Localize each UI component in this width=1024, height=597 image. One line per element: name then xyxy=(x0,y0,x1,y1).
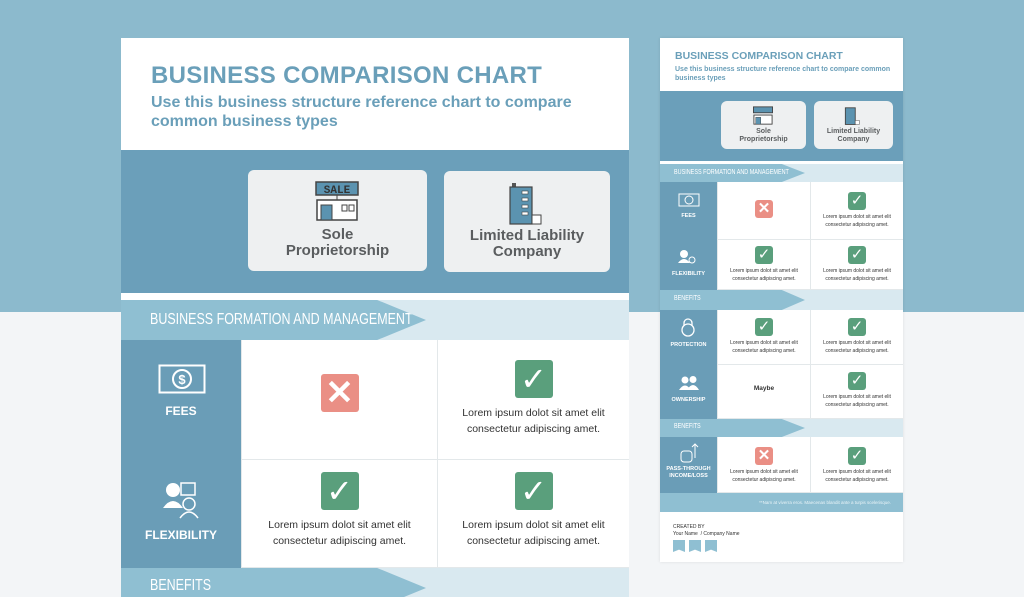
panel: small full chart card: consectetur adipiscing amet. xyxy=(825,222,889,228)
ribbon: benefits 2: BENEFITS xyxy=(674,423,701,430)
subtitle: Use this business structure reference chart to compare common business types xyxy=(151,94,572,130)
panel: small full chart card: Lorem ipsum dolot sit amet elit xyxy=(823,214,891,220)
sidebar 3: PASS-THROUGH xyxy=(666,466,711,472)
section ribbon: benefits: BENEFITS xyxy=(150,577,211,594)
panel: small full chart card: Lorem ipsum dolot sit amet elit xyxy=(823,469,891,475)
row sidebar: FLEXIBILITY xyxy=(145,528,217,542)
title: BUSINESS COMPARISON CHART xyxy=(151,62,542,89)
column header: llc: Company xyxy=(493,243,561,260)
panel: large chart card: consectetur adipiscing amet. xyxy=(467,535,600,547)
header band: Company xyxy=(838,136,869,143)
header band: Sole xyxy=(756,128,771,135)
panel: small full chart card: Lorem ipsum dolot sit amet elit xyxy=(823,340,891,346)
column header: sole proprietorship xyxy=(248,170,427,271)
footnote bar xyxy=(660,493,903,512)
panel: small full chart card xyxy=(660,38,903,562)
header band xyxy=(121,150,629,293)
row sidebar: FEES xyxy=(165,404,197,418)
icon: dollar bill: $ xyxy=(178,372,186,387)
panel: small full chart card: consectetur adipiscing amet. xyxy=(825,477,889,483)
row: flexibility cells: Lorem ipsum dolot sit amet elit xyxy=(268,519,411,531)
panel: small full chart card: consectetur adipiscing amet. xyxy=(825,348,889,354)
panel: small full chart card: Lorem ipsum dolot sit amet elit xyxy=(730,469,798,475)
sidebar 1 xyxy=(660,182,717,290)
panel: large chart card: consectetur adipiscing amet. xyxy=(467,423,600,435)
panel: large chart card: ✓ xyxy=(520,473,547,509)
footer credits: Your Name / Company Name xyxy=(673,531,740,537)
row: fees cells xyxy=(241,340,437,460)
column header: sole proprietorship: Proprietorship xyxy=(286,242,389,259)
panel: small full chart card: ✓ xyxy=(758,318,770,335)
sidebar 3 xyxy=(660,437,717,493)
ribbon: benefits: BENEFITS xyxy=(674,295,701,302)
icon: check: ✓ xyxy=(520,361,547,397)
panel: small full chart card: ✓ xyxy=(851,372,863,389)
icons: social xyxy=(673,540,717,552)
panel: small full chart card: consectetur adipiscing amet. xyxy=(825,276,889,282)
panel: small full chart card: ✕ xyxy=(758,447,770,464)
panel: small full chart card: Lorem ipsum dolot sit amet elit xyxy=(823,268,891,274)
panel: small full chart card: consectetur adipiscing amet. xyxy=(732,276,796,282)
ribbon: formation: BUSINESS FORMATION AND MANAGEMENT xyxy=(674,169,789,176)
panel: large chart card: Lorem ipsum dolot sit amet elit xyxy=(462,407,605,419)
section ribbon: business formation xyxy=(121,300,629,340)
panel: small full chart card: consectetur adipiscing amet. xyxy=(732,477,796,483)
panel: small full chart card: ✓ xyxy=(758,246,770,263)
ribbon: benefits 2 xyxy=(660,419,903,437)
sidebar 1: FLEXIBILITY xyxy=(672,271,705,277)
panel: large chart card: Lorem ipsum dolot sit amet elit xyxy=(462,519,605,531)
panel: small full chart card: ✓ xyxy=(851,192,863,209)
column header: llc xyxy=(444,171,610,272)
icon: cross: ✕ xyxy=(325,374,354,412)
ribbon: benefits xyxy=(660,290,903,310)
sidebar 2 xyxy=(660,310,717,419)
section ribbon: benefits xyxy=(121,568,629,597)
column header: llc: Limited Liability xyxy=(470,227,584,244)
panel: small full chart card: ✕ xyxy=(758,200,770,217)
subtitle: Use this business structure reference chart to compare common business types xyxy=(675,66,890,82)
icon: check xyxy=(514,360,552,398)
panel: small full chart card: ✓ xyxy=(851,318,863,335)
panel: small full chart card: ✓ xyxy=(851,246,863,263)
panel: small full chart card: Lorem ipsum dolot sit amet elit xyxy=(730,268,798,274)
row: flexibility cells xyxy=(241,460,437,568)
panel: small full chart card: Lorem ipsum dolot sit amet elit xyxy=(730,340,798,346)
header band: Proprietorship xyxy=(739,136,788,143)
column header: sole proprietorship: Sole xyxy=(322,226,353,243)
section ribbon: business formation: BUSINESS FORMATION AND MANAGEMENT xyxy=(150,311,413,328)
row sidebar xyxy=(121,340,241,568)
panel: small full chart card: Lorem ipsum dolot sit amet elit xyxy=(823,394,891,400)
icon: office building xyxy=(509,183,542,225)
panel: small full chart card: Maybe xyxy=(754,385,774,392)
footnote bar: **Nam at viverra eros. Maecenas blandit ante a turpis scelerisque. xyxy=(759,500,891,505)
panel: small full chart card: consectetur adipiscing amet. xyxy=(732,348,796,354)
footer credits: CREATED BY xyxy=(673,524,705,530)
title: BUSINESS COMPARISON CHART xyxy=(675,50,843,62)
row: flexibility cells: ✓ xyxy=(326,473,353,509)
footer credits xyxy=(673,524,740,537)
panel: small full chart card: consectetur adipiscing amet. xyxy=(825,402,889,408)
panel: small full chart card: ✓ xyxy=(851,447,863,464)
icon: sale shop xyxy=(315,181,359,221)
sidebar 3: INCOME/LOSS xyxy=(669,473,708,479)
panel: large chart card xyxy=(121,38,629,597)
header band xyxy=(660,91,903,161)
ribbon: formation xyxy=(660,164,903,182)
header band: Limited Liability xyxy=(827,128,880,135)
row: flexibility cells: consectetur adipiscing amet. xyxy=(273,535,406,547)
sidebar 1: FEES xyxy=(681,213,696,219)
icon: sale shop: SALE xyxy=(324,185,351,197)
icon: dollar bill xyxy=(158,364,206,394)
sidebar 2: PROTECTION xyxy=(670,342,707,348)
sidebar 2: OWNERSHIP xyxy=(672,397,705,403)
icon: flexibility people xyxy=(163,482,198,518)
